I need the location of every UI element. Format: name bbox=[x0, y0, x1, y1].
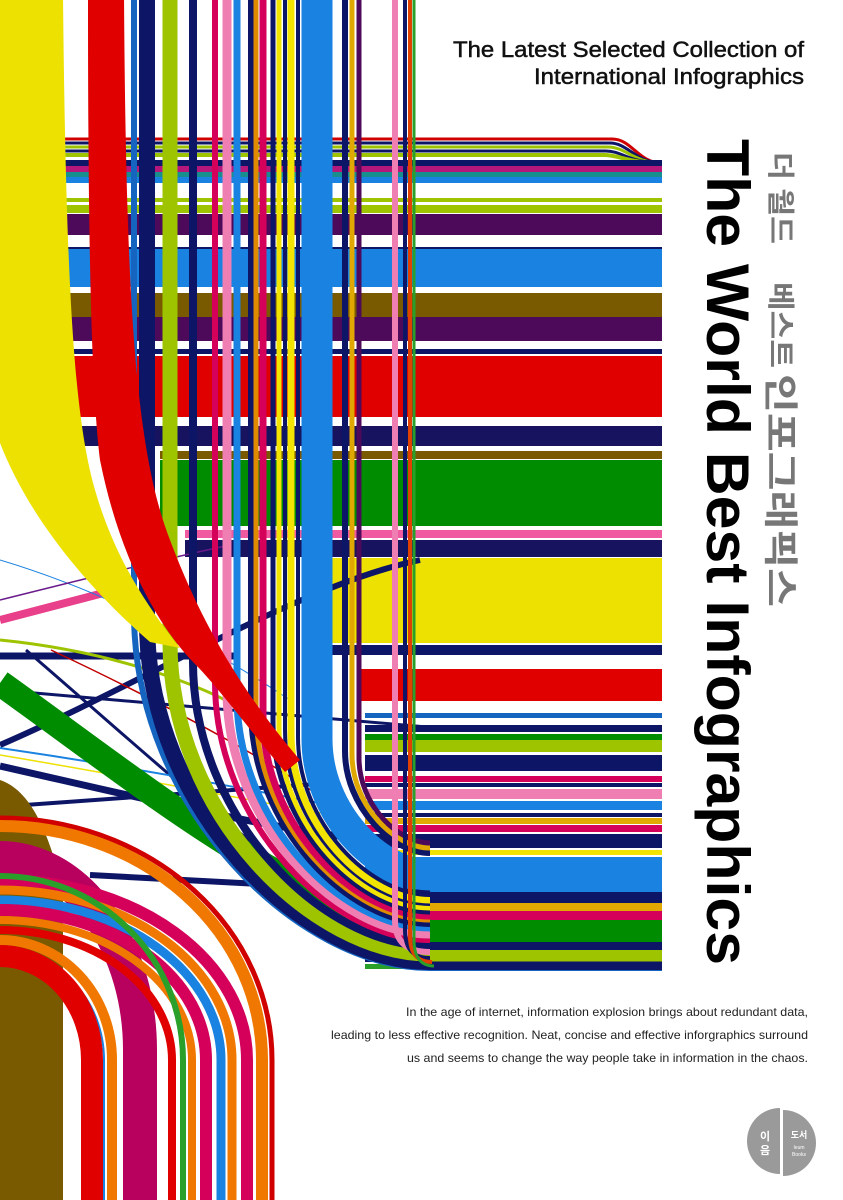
icon: publisher logo: Books bbox=[792, 1152, 806, 1158]
title: vertical Korean: 더 월드 bbox=[765, 152, 796, 244]
icon: publisher logo: Ieum bbox=[793, 1145, 805, 1151]
yellow ribbon bbox=[0, 0, 180, 648]
horizontal bands bbox=[63, 139, 662, 969]
text block: description bbox=[331, 1005, 808, 1065]
vertical ribbons curving into bottom bundle bbox=[134, 0, 662, 968]
heading: top right subtitle: The Latest Selected Collection of bbox=[453, 37, 805, 62]
text block: description: In the age of internet, information explosion brings about redundant data, bbox=[406, 1005, 808, 1019]
icon: publisher logo: 이 bbox=[760, 1130, 770, 1143]
heading: top right subtitle: International Infographics bbox=[534, 64, 804, 89]
crossing lines bbox=[0, 545, 450, 962]
title: vertical Korean bbox=[760, 152, 799, 607]
title: vertical Korean: 베스트 bbox=[765, 282, 796, 368]
text block: description: us and seems to change the way people take in information in the chaos. bbox=[407, 1051, 808, 1065]
icon: publisher logo: 도서 bbox=[791, 1129, 807, 1140]
red ribbon bbox=[88, 0, 300, 772]
title: vertical Korean: 인포그래픽스 bbox=[760, 374, 799, 607]
icon: publisher logo bbox=[747, 1108, 816, 1176]
heading: top right subtitle bbox=[453, 37, 805, 89]
green diagonal ribbon bbox=[0, 683, 662, 933]
text block: description: leading to less effective recognition. Neat, concise and effective inforgraphics surround bbox=[331, 1028, 808, 1042]
icon: publisher logo: 음 bbox=[760, 1144, 770, 1157]
title: vertical English: The World Best Infographics bbox=[694, 139, 761, 965]
bottom-left dome of stripes bbox=[0, 780, 272, 1200]
